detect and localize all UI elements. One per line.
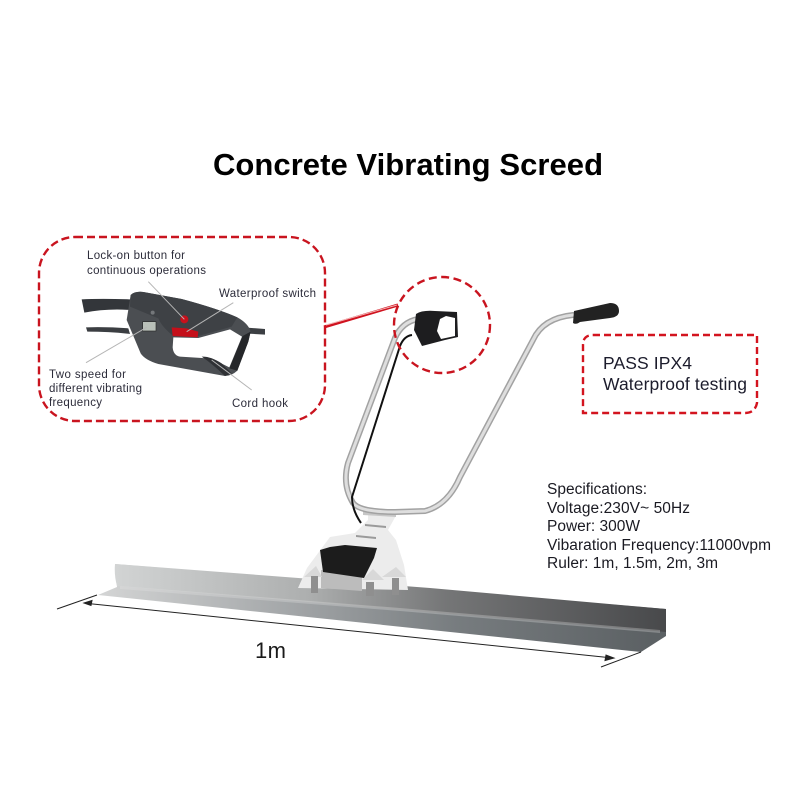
- panel: IPX4 callout: [583, 335, 757, 413]
- highlight circle: [394, 277, 490, 373]
- label: continuous operations: continuous operations: [87, 265, 206, 277]
- icon: switch handle illustration: [82, 282, 265, 390]
- label: frequency: frequency: [49, 397, 102, 409]
- switch handle on tube: [414, 311, 458, 346]
- handle opening: [173, 329, 242, 367]
- label: different vibrating: different vibrating: [49, 383, 142, 395]
- specifications text block: [547, 481, 771, 572]
- title: Concrete Vibrating Screed: [213, 147, 603, 182]
- screed blade: [98, 564, 666, 652]
- motor mount and motor: [298, 507, 408, 596]
- specifications text block: Power: 300W: [547, 518, 640, 535]
- specifications text block: Vibaration Frequency:11000vpm: [547, 537, 771, 554]
- power cable: [352, 335, 412, 523]
- U-shaped tube handle: [346, 315, 573, 523]
- panel: handle detail callout: [39, 237, 325, 421]
- specifications text block: Specifications:: [547, 481, 647, 498]
- specifications text block: Ruler: 1m, 1.5m, 2m, 3m: [547, 555, 718, 572]
- label: waterproof switch: Waterproof switch: [219, 288, 316, 300]
- callout text: pass: PASS IPX4: [603, 353, 692, 373]
- handle grip: [573, 303, 619, 324]
- callout text: waterproof: Waterproof testing: [603, 374, 747, 394]
- specifications text block: Voltage:230V~ 50Hz: [547, 500, 690, 517]
- label: lock-on button: Lock-on button for: [87, 250, 185, 262]
- label: cord hook: Cord hook: [232, 398, 288, 410]
- dimension arrow: [57, 595, 641, 667]
- dimension label: 1m: [255, 638, 286, 663]
- label: two speed: Two speed for: [49, 369, 126, 381]
- connector line from callout to handle: [324, 305, 398, 327]
